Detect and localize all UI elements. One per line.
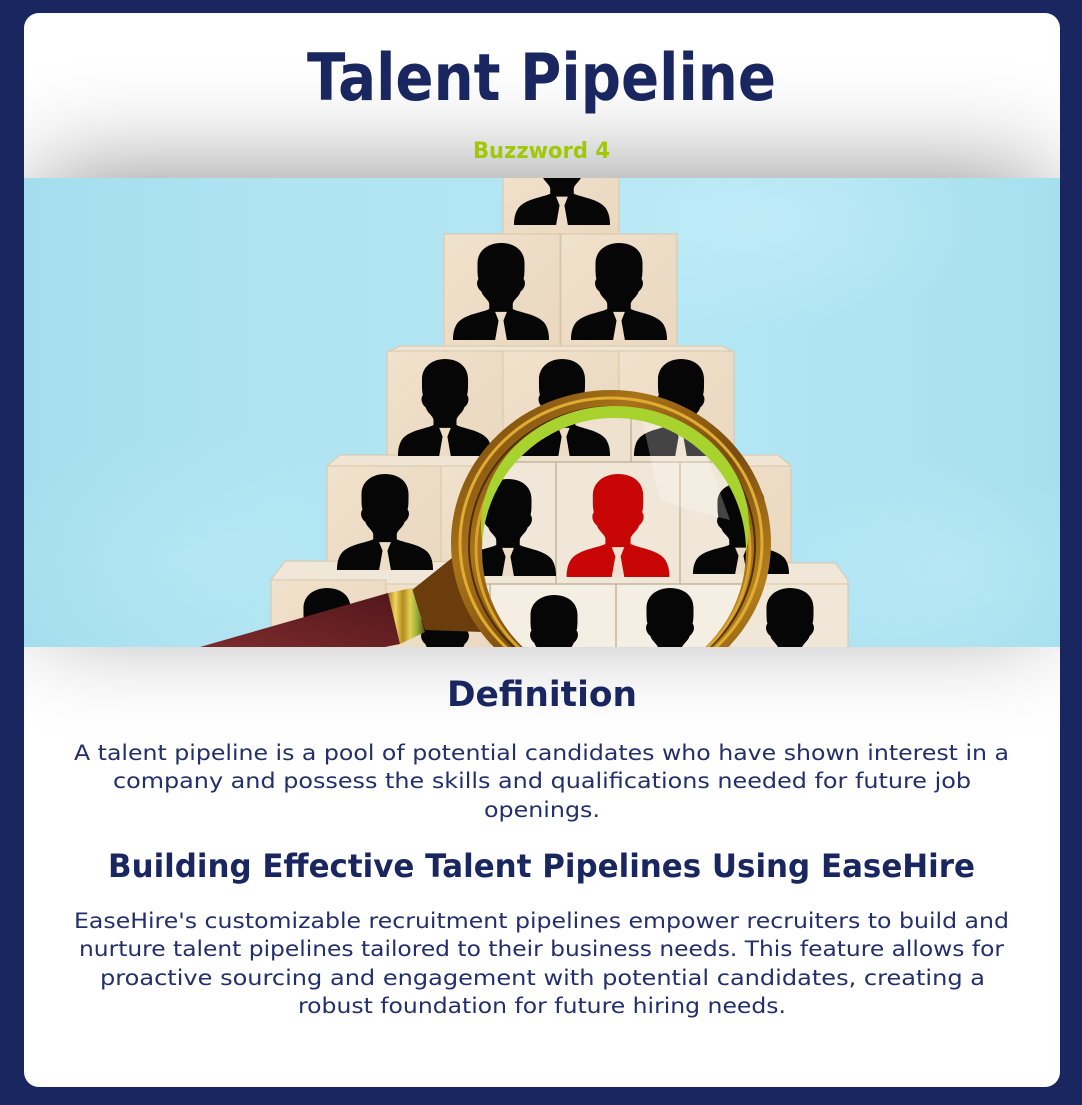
photo: wooden blocks pyramid with magnifying glass (24, 178, 1060, 647)
magnifier gold rim (451, 390, 771, 696)
text block: EaseHire feature: proactive sourcing and engagement with potential candidates, creating a (100, 966, 985, 990)
text block: EaseHire feature (74, 909, 1009, 1018)
magnifier collar (388, 588, 425, 644)
text block: definition: A talent pipeline is a pool of potential candidates who have shown interest in a (74, 741, 1009, 765)
text block: definition: company and possess the skills and qualifications needed for future job (113, 769, 971, 793)
title: Talent Pipeline (307, 41, 776, 116)
text block: EaseHire feature: robust foundation for future hiring needs. (298, 994, 786, 1018)
text block: EaseHire feature: EaseHire's customizable recruitment pipelines empower recruiters to build and (74, 909, 1009, 933)
magnifier handle (200, 593, 400, 647)
person silhouettes (279, 127, 838, 692)
red highlighted candidate (567, 474, 669, 577)
wooden blocks (271, 170, 848, 660)
magnifier neck (412, 558, 482, 632)
subtitle: Buzzword 4 (473, 139, 610, 164)
magnifying lens view (482, 418, 746, 647)
heading: building effective talent pipelines: Building Effective Talent Pipelines Using EaseHire (108, 847, 975, 885)
heading: definition: Definition (447, 675, 637, 715)
text block: EaseHire feature: nurture talent pipelines tailored to their business needs. This feature allows for (79, 937, 1004, 961)
background: blue wall (0, 110, 1082, 690)
lens green reflection (481, 406, 749, 646)
text block: definition (74, 741, 1009, 822)
text block: definition: openings. (484, 798, 600, 822)
